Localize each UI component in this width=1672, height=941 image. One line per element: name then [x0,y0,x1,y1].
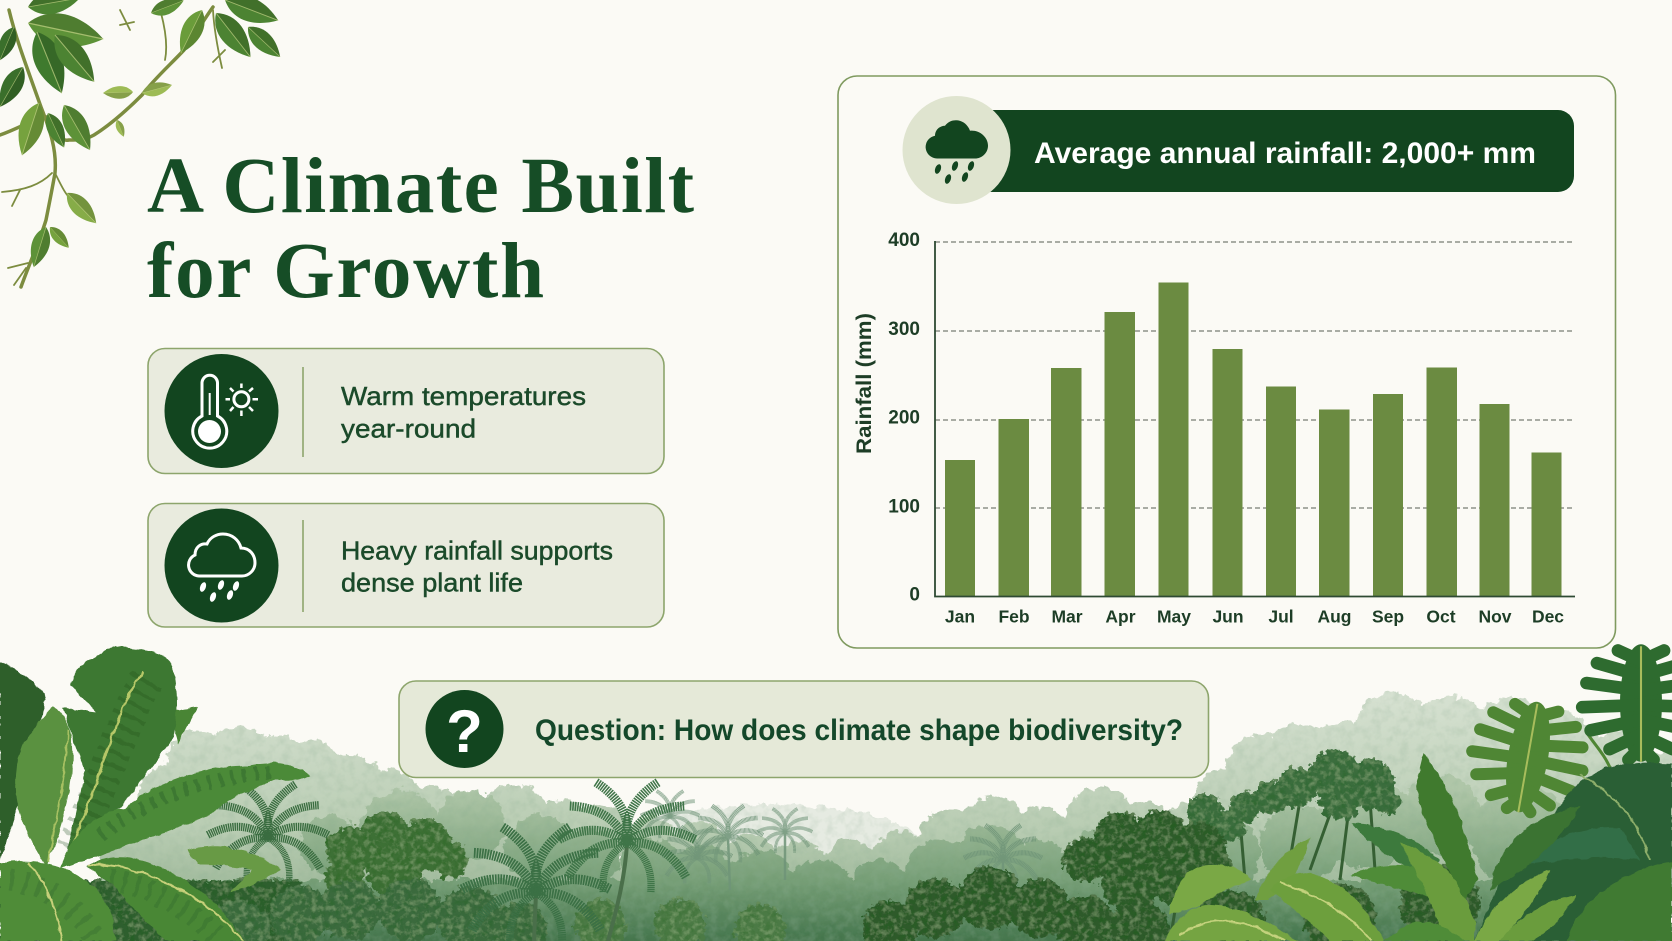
x axis labels: Apr [1105,606,1136,626]
banana plant, left [0,647,310,941]
front tree crowns [0,749,1480,941]
x axis labels: Jul [1268,606,1294,626]
card text [341,381,586,444]
card text [341,536,613,598]
y axis title: Rainfall (mm) [853,313,876,454]
card: warm temperatures [148,348,664,474]
far misty hills [100,692,1672,941]
x axis labels: Mar [1051,606,1083,626]
y axis labels: 0 [909,584,920,606]
tropical plants, right [1164,644,1672,941]
title [147,143,694,315]
x axis labels: May [1157,606,1191,626]
y axis labels: 100 [888,496,920,518]
callout: question [399,681,1208,778]
card: heavy rainfall [148,504,664,627]
card text: dense plant life [341,568,523,598]
x axis labels: Feb [998,606,1030,626]
mid canopy [150,775,1672,941]
icon: question mark [426,690,504,768]
callout: question: Question: How does climate shape biodiversity? [535,714,1183,747]
card text: Heavy rainfall supports [341,536,613,566]
y axis labels: 400 [888,230,920,251]
x axis labels: Jun [1212,606,1244,626]
x axis labels: Dec [1532,606,1564,626]
x axis labels: Aug [1317,606,1352,626]
x axis labels: Oct [1426,606,1456,626]
y axis labels [888,230,920,606]
x axis labels: Jan [945,606,975,626]
icon: question mark: ? [446,698,483,765]
icon: rain cloud [164,508,278,622]
y axis labels: 300 [888,319,920,340]
illustration: jungle treeline [0,644,1672,941]
card text: Warm temperatures [341,381,586,411]
header banner: Average annual rainfall: 2,000+ mm [1034,137,1536,170]
header banner [902,96,1574,204]
title: for Growth [147,228,544,315]
title: A Climate Built [147,143,694,230]
x axis labels: Sep [1372,606,1404,626]
distant palms [641,789,1042,900]
monstera leaves [1463,644,1672,822]
card text: year-round [341,414,476,444]
bar chart [853,230,1575,626]
vine with leaves, top left [0,0,286,287]
icon: solid rain cloud [926,120,988,185]
palm trees [207,777,696,941]
trunks [380,800,1375,941]
panel: rainfall chart [838,76,1616,648]
x axis labels [945,606,1564,626]
x axis labels: Nov [1478,606,1512,626]
y axis labels: 200 [888,408,920,428]
icon: thermometer and sun [164,354,278,468]
